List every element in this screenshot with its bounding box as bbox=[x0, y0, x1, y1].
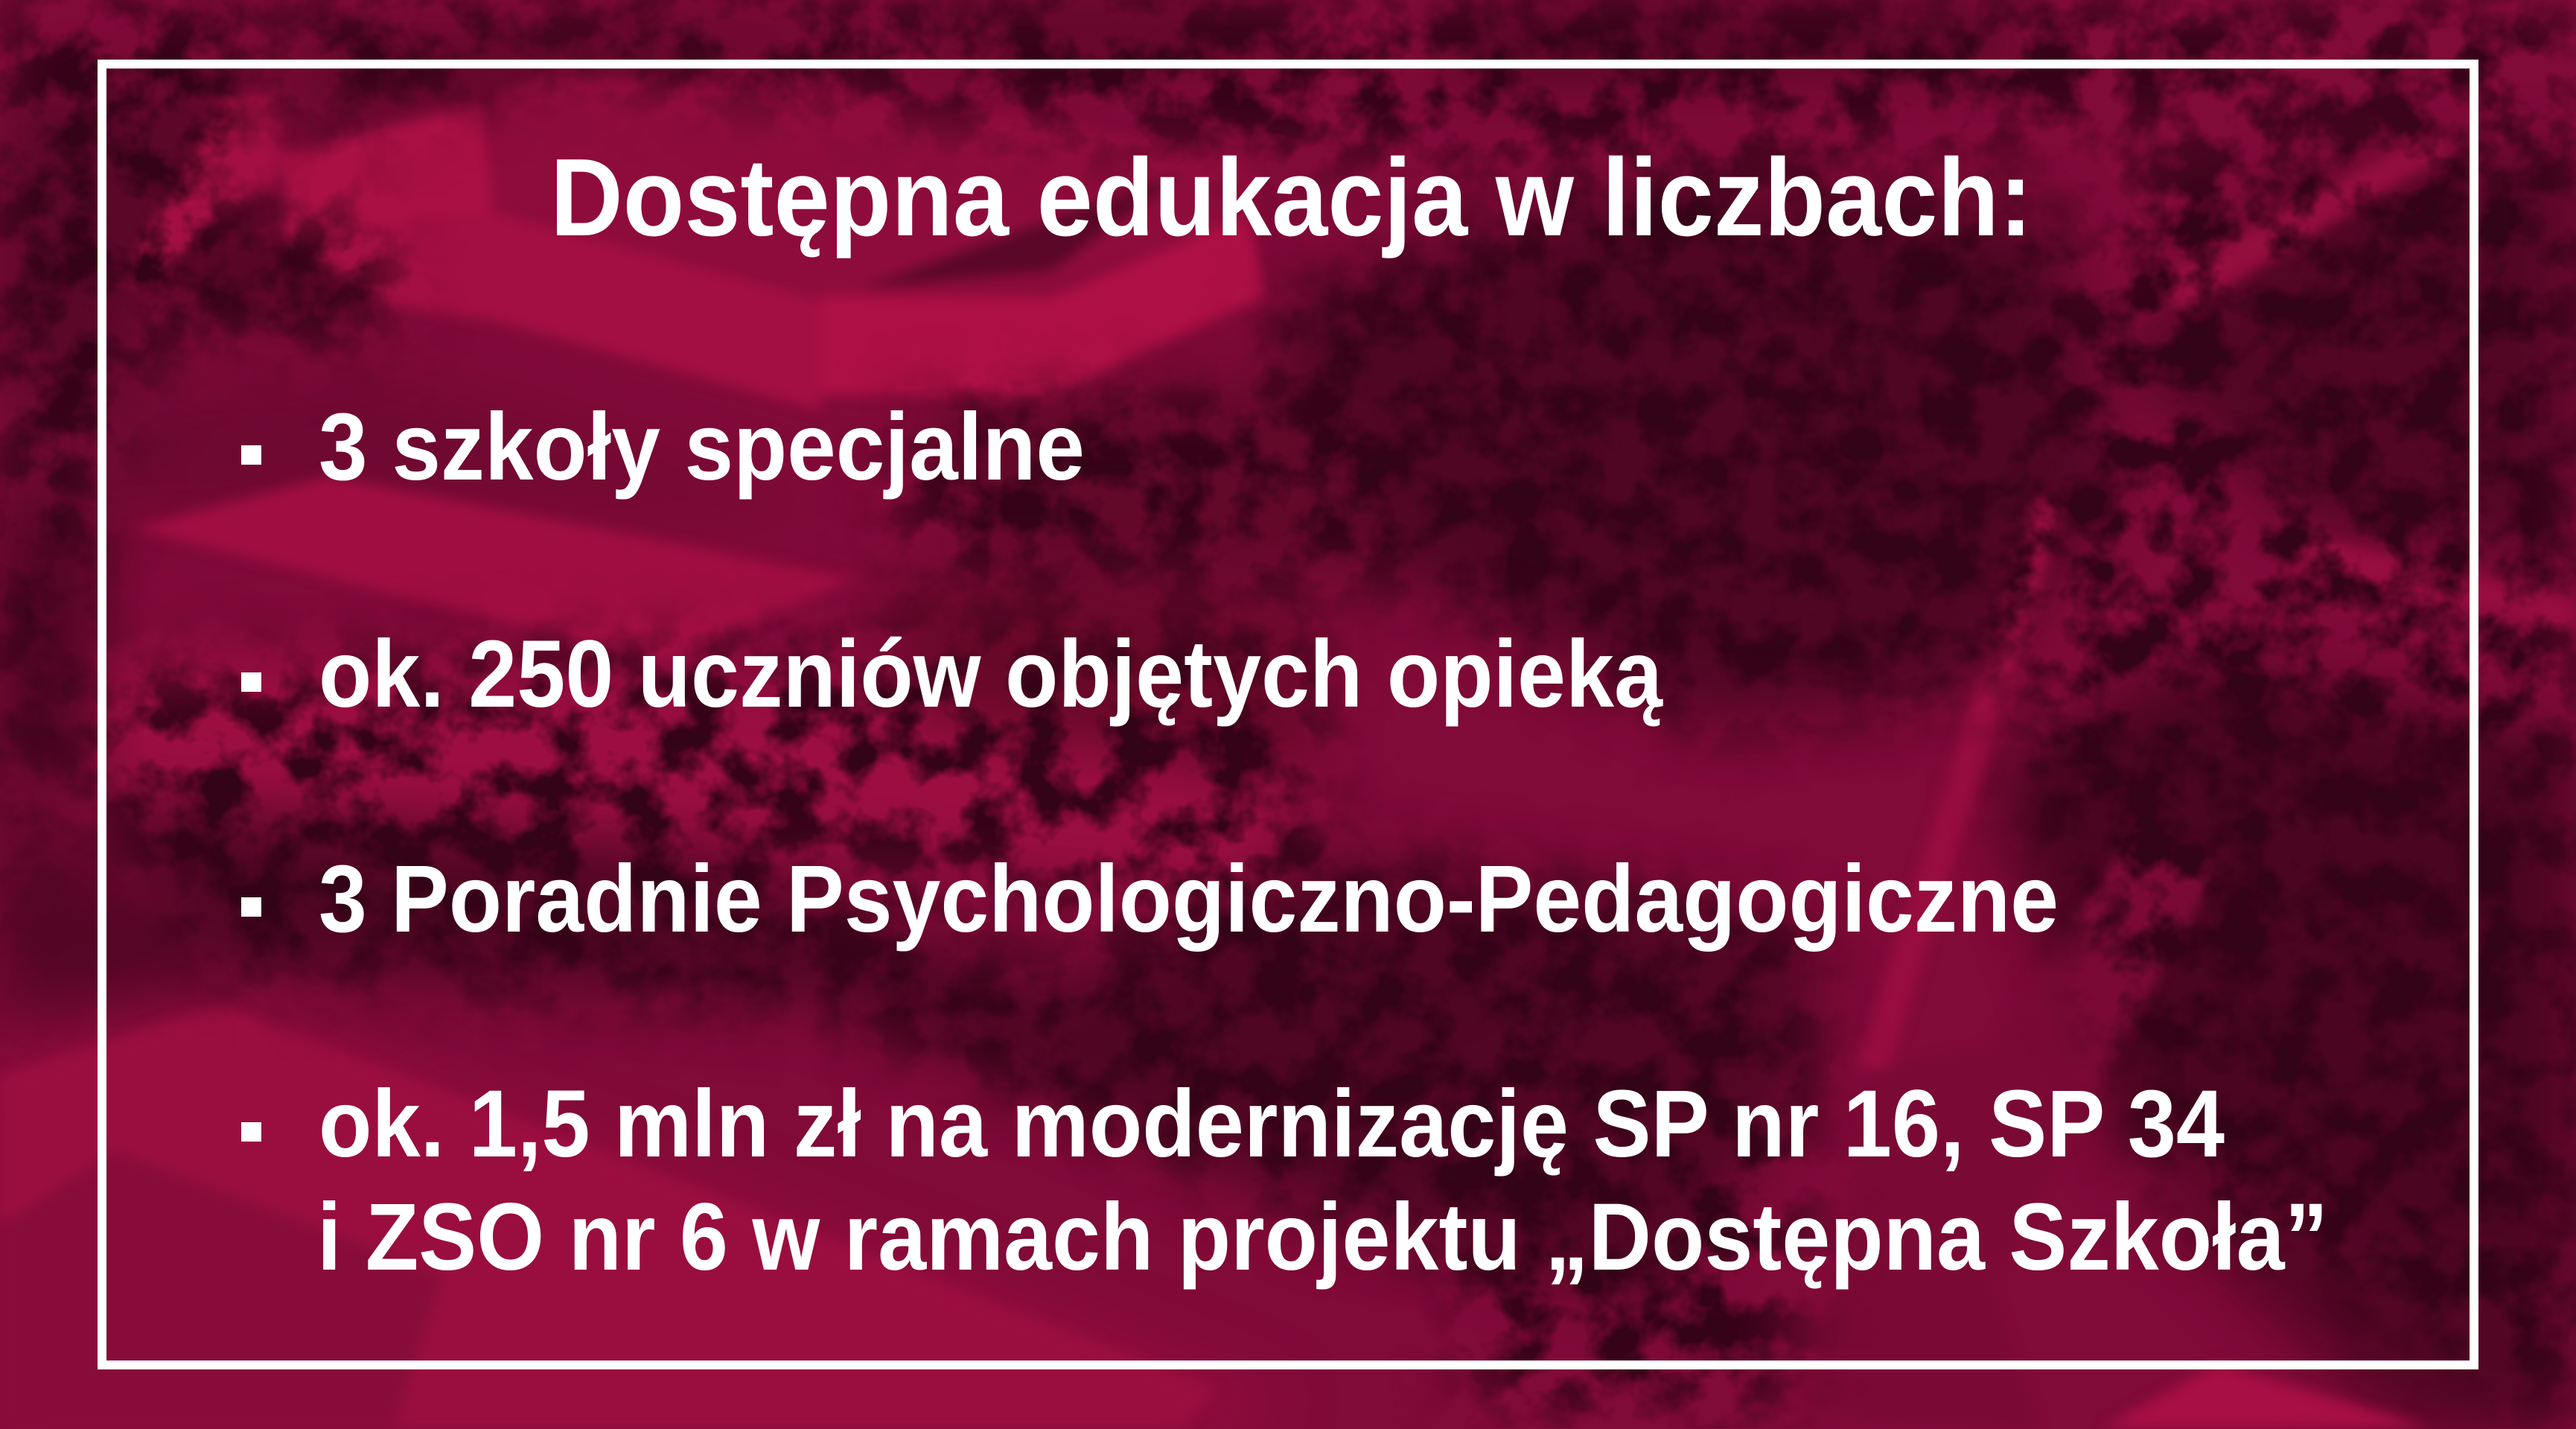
list item: modernisation funding: ok. 1,5 mln zł na modernizację SP nr 16, SP 34 bbox=[319, 1071, 2225, 1177]
road left bbox=[123, 90, 283, 287]
school building bbox=[493, 74, 1265, 296]
list item: students: ok. 250 uczniów objętych opieką bbox=[319, 621, 1663, 728]
bottom-left pitch bbox=[0, 1005, 1216, 1428]
bullet 2 bbox=[241, 672, 261, 692]
bullet 4 bbox=[241, 1122, 261, 1142]
list item: special schools: 3 szkoły specjalne bbox=[319, 394, 1085, 500]
bullet 1 bbox=[241, 445, 261, 465]
list item: modernisation funding bbox=[241, 1071, 2328, 1290]
dark tree masses bbox=[1265, 181, 2120, 723]
mid-tone grounds bbox=[98, 658, 1314, 888]
list item: counselling centres: 3 Poradnie Psychologiczno-Pedagogiczne bbox=[319, 846, 2059, 952]
road strip bottom right bbox=[1807, 821, 2218, 1428]
list item: modernisation funding: i ZSO nr 6 w ramach projektu „Dostępna Szkoła” bbox=[317, 1184, 2328, 1290]
title: Dostępna edukacja w liczbach: bbox=[550, 136, 2033, 259]
sports court bbox=[132, 477, 854, 661]
bullet 3 bbox=[241, 897, 261, 917]
